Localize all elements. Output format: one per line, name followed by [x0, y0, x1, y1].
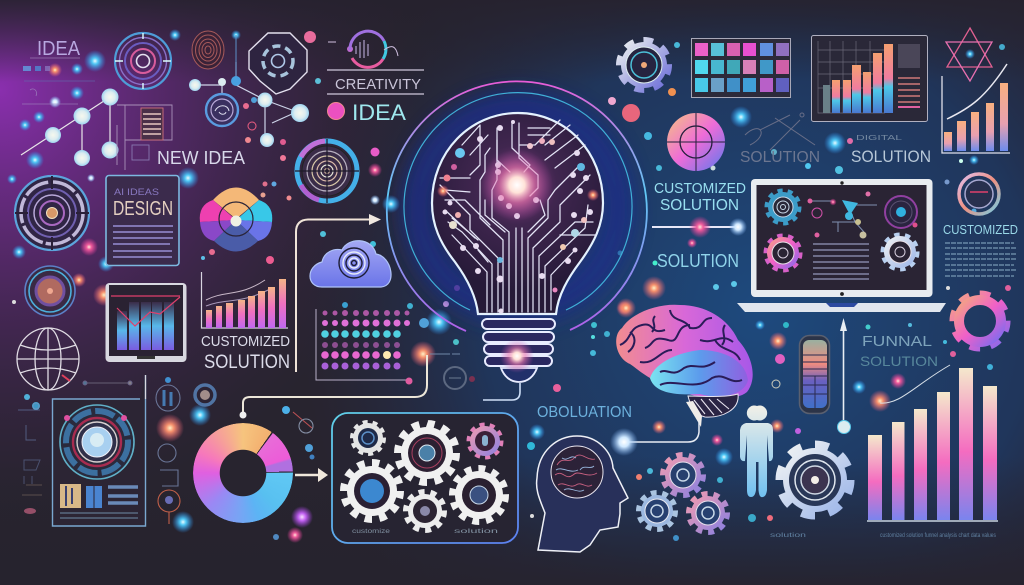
icon: head silhouette — [537, 436, 628, 552]
connector arrow to bulb — [296, 214, 381, 372]
panel: colour tile grid — [692, 38, 790, 98]
label: FUNNAL SOLUTION: FUNNAL — [862, 333, 932, 350]
screen network — [808, 192, 877, 238]
gear large left — [344, 463, 400, 519]
label: FUNNAL SOLUTION: SOLUTION — [860, 353, 938, 369]
line from orb right of dot chart — [430, 353, 460, 355]
connector: donut to bulb — [240, 355, 520, 418]
label: CUSTOMIZED SOLUTION: SOLUTION — [204, 352, 290, 373]
screen gear white-blue — [883, 235, 917, 269]
label: faint caption above SOLUTION: DIGITAL — [856, 135, 902, 142]
icon: cloud — [310, 241, 391, 287]
icon: eye ring lower left — [25, 266, 75, 316]
bar chart small — [202, 272, 288, 328]
brain wire — [626, 420, 699, 442]
brain stem — [686, 401, 702, 427]
icon cluster: small chips under IDEA — [22, 58, 95, 104]
inner dotted arc — [404, 93, 632, 310]
dot matrix chart — [316, 309, 412, 384]
label: DESIGN: DESIGN — [113, 198, 173, 220]
icon: gear top right of bulb — [620, 41, 668, 89]
heading: CREATIVITY — [327, 70, 424, 94]
bulb outline — [432, 113, 603, 314]
label: SOLUTION upper right: SOLUTION — [851, 147, 931, 166]
central lightbulb illustration — [382, 81, 647, 382]
icon: fingerprint wheel — [295, 139, 359, 203]
icon: pink gear cluster — [639, 455, 727, 532]
gear large right — [453, 469, 505, 521]
icon: tablet with chart — [106, 283, 186, 362]
dim side icons left column — [18, 381, 132, 514]
text lines — [113, 226, 173, 257]
donut chart — [193, 423, 293, 523]
gear pink top-right — [469, 425, 501, 457]
icon: large pink gear — [953, 294, 1007, 348]
label: CUSTOMIZED SOLUTION cyan — [654, 180, 746, 214]
label: CUSTOMIZED SOLUTION cyan: CUSTOMIZED — [654, 180, 746, 197]
gear captions — [352, 529, 498, 535]
icon: concentric target left — [15, 176, 89, 250]
network graph left — [21, 88, 118, 166]
label: SOLUTION cyan: SOLUTION — [657, 251, 739, 271]
icon: person — [740, 406, 773, 497]
text lines right — [945, 243, 1016, 276]
icon: octagon dial — [249, 33, 307, 94]
icon: brain — [610, 305, 753, 456]
arrow: donut to gears — [295, 468, 328, 482]
caption dim bottom: solution — [770, 533, 806, 539]
label: NEW IDEA: NEW IDEA — [157, 148, 245, 168]
gear captions: customize — [352, 529, 391, 535]
icon: hexagram star — [946, 28, 992, 81]
centre light glow — [481, 149, 553, 221]
base glow — [500, 339, 534, 373]
circuit traces — [440, 120, 596, 312]
sulci — [620, 310, 742, 385]
icon: customized ring — [959, 174, 999, 214]
label: CUSTOMIZED SOLUTION cyan: SOLUTION — [660, 197, 739, 214]
icon: small ring badge — [444, 367, 475, 389]
icon: fingerprint — [192, 31, 224, 69]
panel: DESIGN document — [106, 176, 179, 266]
icon: target ring top left — [115, 33, 171, 89]
screen gear blue — [767, 191, 799, 223]
gear captions: solution — [454, 529, 498, 535]
label: dim SOLUTION: SOLUTION — [740, 149, 820, 166]
heading: IDEA: IDEA — [37, 38, 81, 60]
circuit nodes — [437, 120, 599, 314]
heading: CREATIVITY: CREATIVITY — [335, 77, 421, 93]
icon: calculator pill — [800, 336, 830, 414]
panel: gears box — [332, 413, 518, 543]
screen gear dark — [885, 196, 918, 228]
panel: equalizer bar chart — [812, 36, 928, 122]
mini charts — [60, 484, 81, 508]
dial — [60, 405, 134, 479]
icon: globe — [17, 328, 79, 390]
gear small bottom — [406, 492, 444, 530]
screen gear pink — [766, 236, 800, 270]
gear small top-left — [352, 422, 384, 454]
label: CUSTOMIZED SOLUTION: CUSTOMIZED — [201, 334, 290, 350]
icon: large gear — [781, 446, 849, 514]
icon: pink orb — [328, 102, 344, 120]
caption dim bottom — [770, 533, 996, 539]
blue halo — [418, 108, 618, 308]
laptop — [737, 179, 946, 312]
icon: blurred sketch above SOLUTION — [745, 113, 815, 150]
arrow vertical — [838, 318, 850, 434]
label: CUSTOMIZED SOLUTION — [201, 334, 290, 373]
caption dim bottom: customized solution funnel analysis chart data values — [880, 533, 996, 539]
panel: dial dashboard — [52, 375, 146, 526]
icon: document sketch — [117, 105, 172, 170]
icon: colour wheel — [200, 188, 272, 252]
connector line with glow — [652, 216, 747, 238]
bar chart large — [867, 365, 998, 521]
small header text: AI IDEAS — [114, 187, 159, 197]
label: OBOLUATION: OBOLUATION — [537, 404, 632, 421]
cerebellum — [688, 394, 738, 417]
label: FUNNAL SOLUTION — [860, 333, 938, 369]
icon: colourful ring with waveform — [328, 31, 398, 67]
screw base — [482, 319, 555, 366]
network graph centre — [189, 35, 309, 147]
base tip — [501, 368, 537, 382]
dim side icons between panel and donut — [156, 385, 313, 524]
screen text lines — [813, 244, 869, 279]
outer arc — [387, 81, 647, 331]
icon: colour sphere — [667, 113, 725, 171]
arc accent glow — [382, 195, 400, 213]
line and bar chart right — [942, 64, 1010, 153]
gear large top — [398, 424, 456, 482]
heading: IDEA cyan: IDEA — [352, 100, 406, 125]
